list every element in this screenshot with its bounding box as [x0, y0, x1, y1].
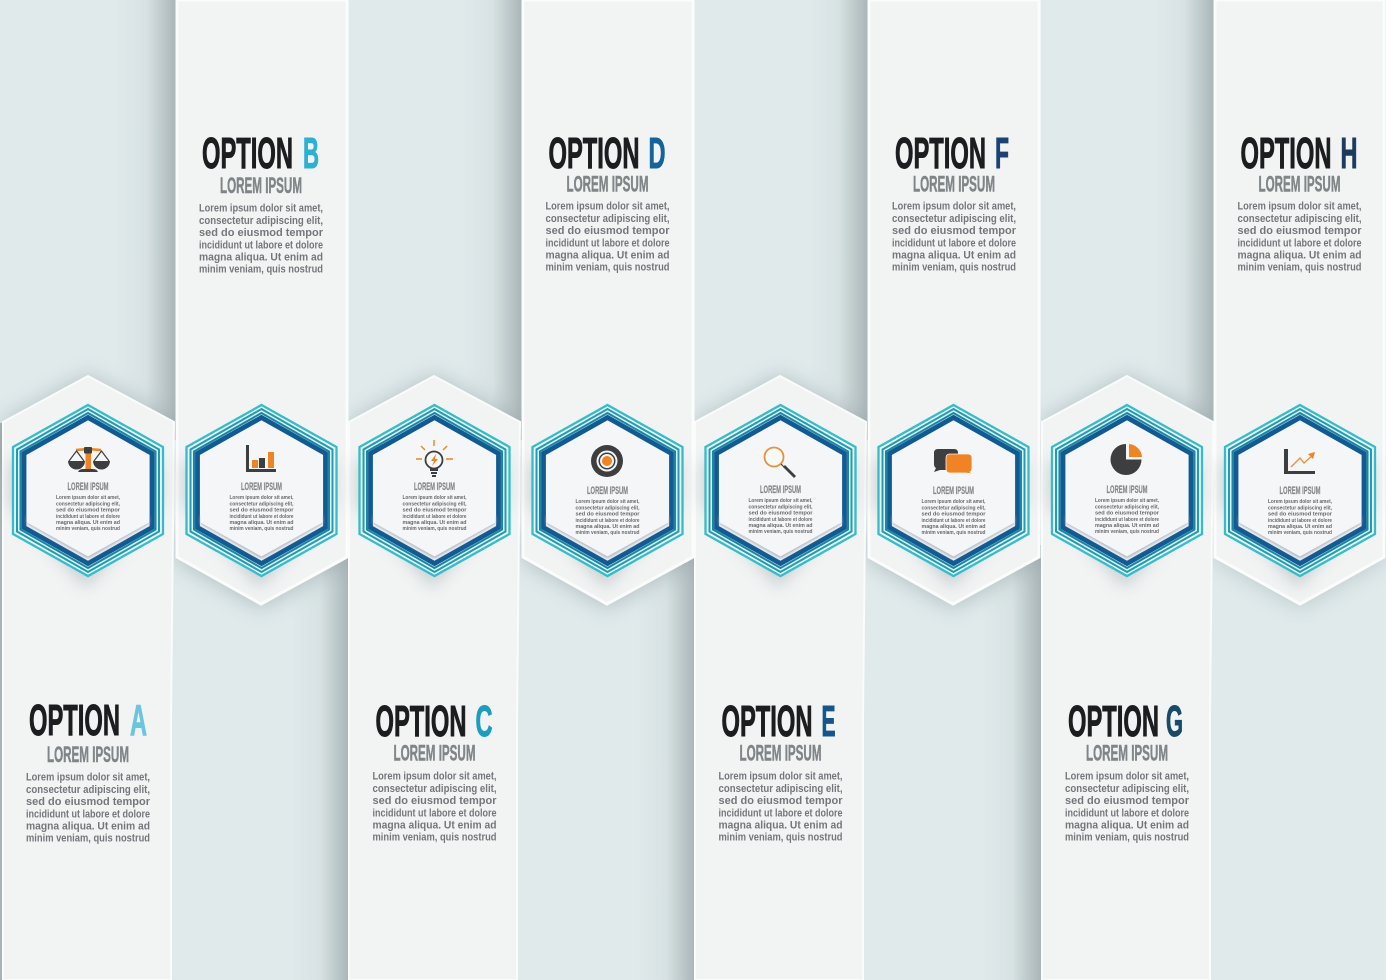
text block: option C: incididunt ut labore et dolore [372, 807, 496, 819]
hexagon E [702, 405, 856, 588]
text block: option D: LOREM IPSUM [566, 172, 648, 196]
icon: magnifier [764, 448, 795, 477]
hexagon text D: magna aliqua. Ut enim ad [576, 524, 640, 530]
text block: option H: Lorem ipsum dolor sit amet, [1238, 200, 1362, 212]
text block: option G: consectetur adipiscing elit, [1065, 783, 1189, 795]
text block: option F [892, 129, 1017, 274]
text block: option C: Lorem ipsum dolor sit amet, [372, 770, 496, 782]
hexagon text C: Lorem ipsum dolor sit amet, [402, 495, 467, 501]
text block: option B: LOREM IPSUM [220, 173, 302, 198]
hexagon text B: magna aliqua. Ut enim ad [230, 520, 294, 526]
text block: option F: OPTION [895, 129, 986, 178]
hexagon text C: incididunt ut labore et dolore [402, 514, 466, 520]
hexagon text H: magna aliqua. Ut enim ad [1268, 524, 1333, 530]
hexagon F [876, 405, 1028, 588]
hexagon text A: sed do eiusmod tempor [56, 508, 121, 514]
text block: option D: Lorem ipsum dolor sit amet, [546, 200, 670, 212]
text block: option D: OPTION [548, 129, 640, 178]
text block: option B: incididunt ut labore et dolore [199, 239, 323, 251]
hexagon text H [1268, 485, 1333, 536]
hexagon text F: LOREM IPSUM [933, 485, 974, 497]
hexagon text G: Lorem ipsum dolor sit amet, [1095, 498, 1159, 504]
hexagon text C: minim veniam, quis nostrud [402, 526, 467, 532]
text block: option E: Lorem ipsum dolor sit amet, [718, 770, 842, 782]
text block: option C: consectetur adipiscing elit, [372, 783, 496, 795]
hexagon text H: incididunt ut labore et dolore [1268, 518, 1332, 524]
text block: option D: consectetur adipiscing elit, [546, 213, 670, 225]
panel D [523, 0, 693, 604]
panel F [869, 0, 1039, 604]
text block: option C: sed do eiusmod tempor [372, 795, 497, 807]
text block: option A: Lorem ipsum dolor sit amet, [26, 772, 150, 784]
text block: option B: magna aliqua. Ut enim ad [199, 252, 323, 264]
text block: option G [1065, 697, 1190, 844]
text block: option B [199, 129, 324, 276]
text block: option F: incididunt ut labore et dolore [892, 237, 1016, 249]
hexagon text E: magna aliqua. Ut enim ad [748, 523, 813, 529]
text block: option C: LOREM IPSUM [394, 740, 476, 766]
icon: bar chart [246, 445, 276, 472]
hexagon text D: consectetur adipiscing elit, [576, 505, 640, 511]
hexagon text A: consectetur adipiscing elit, [56, 501, 120, 507]
panel A [3, 376, 174, 980]
text block: option H: magna aliqua. Ut enim ad [1238, 250, 1362, 262]
hexagon text C: LOREM IPSUM [414, 481, 455, 493]
text block: option D: D [648, 129, 666, 178]
text block: option E [718, 697, 843, 844]
hexagon text B [230, 481, 294, 532]
hexagon text D: LOREM IPSUM [587, 485, 628, 497]
text block: option A: consectetur adipiscing elit, [26, 784, 150, 796]
text block: option G: Lorem ipsum dolor sit amet, [1065, 770, 1189, 782]
hexagon text B: minim veniam, quis nostrud [230, 526, 294, 532]
hexagon text B: Lorem ipsum dolor sit amet, [230, 495, 294, 501]
text block: option G: minim veniam, quis nostrud [1065, 832, 1189, 844]
text block: option E: OPTION [722, 697, 812, 746]
hexagon text G [1095, 484, 1160, 535]
text block: option E: E [822, 697, 836, 746]
panel E [695, 376, 866, 980]
hexagon text D: incididunt ut labore et dolore [576, 518, 640, 524]
panel G [1042, 376, 1213, 980]
text block: option A: LOREM IPSUM [47, 742, 129, 767]
text block: option E: magna aliqua. Ut enim ad [718, 820, 842, 832]
text block: option G: incididunt ut labore et dolore [1065, 807, 1189, 819]
hexagon text H: LOREM IPSUM [1280, 485, 1320, 497]
hexagon text D: sed do eiusmod tempor [576, 512, 640, 518]
panel C [349, 376, 520, 980]
hexagon A [10, 405, 163, 588]
hexagon text C: sed do eiusmod tempor [402, 508, 467, 514]
text block: option B: Lorem ipsum dolor sit amet, [199, 202, 323, 214]
hexagon text H: Lorem ipsum dolor sit amet, [1268, 499, 1332, 505]
text block: option F: LOREM IPSUM [913, 172, 995, 196]
text block: option E: minim veniam, quis nostrud [718, 832, 842, 844]
hexagon text H: sed do eiusmod tempor [1268, 512, 1333, 518]
hexagon text D: minim veniam, quis nostrud [576, 530, 640, 536]
text block: option E: sed do eiusmod tempor [718, 795, 843, 807]
icon: line chart [1284, 449, 1315, 474]
text block: option F: F [995, 129, 1009, 178]
text block: option G: sed do eiusmod tempor [1065, 795, 1190, 807]
text block: option C [372, 697, 497, 844]
hexagon text E: consectetur adipiscing elit, [748, 504, 813, 510]
text block: option B: minim veniam, quis nostrud [199, 264, 323, 276]
text block: option G: G [1166, 697, 1183, 746]
text block: option D: minim veniam, quis nostrud [546, 262, 670, 274]
text block: option G: magna aliqua. Ut enim ad [1065, 820, 1189, 832]
text block: option E: consectetur adipiscing elit, [718, 783, 842, 795]
text block: option F: minim veniam, quis nostrud [892, 262, 1016, 274]
icon: light bulb [416, 440, 453, 477]
text block: option B: B [303, 129, 319, 178]
hexagon text A [56, 481, 121, 532]
text block: option C: magna aliqua. Ut enim ad [372, 820, 496, 832]
text block: option E: LOREM IPSUM [740, 740, 822, 766]
text block: option B: OPTION [202, 129, 293, 178]
hexagon C [356, 405, 510, 588]
hexagon text B: consectetur adipiscing elit, [230, 501, 294, 507]
text block: option F: sed do eiusmod tempor [892, 225, 1017, 237]
hexagon text A: magna aliqua. Ut enim ad [56, 520, 121, 526]
icon: speech bubbles [934, 449, 973, 474]
hexagon text F: consectetur adipiscing elit, [922, 505, 986, 511]
hexagon text F: incididunt ut labore et dolore [922, 518, 986, 524]
hexagon text E: minim veniam, quis nostrud [748, 529, 813, 535]
text block: option D: magna aliqua. Ut enim ad [546, 250, 670, 262]
text block: option A: minim veniam, quis nostrud [26, 833, 150, 845]
hexagon text D [576, 485, 640, 536]
hexagon text C: magna aliqua. Ut enim ad [402, 520, 467, 526]
hexagon text G: minim veniam, quis nostrud [1095, 529, 1159, 535]
hexagon text G: sed do eiusmod tempor [1095, 511, 1160, 517]
hexagon text F: sed do eiusmod tempor [922, 512, 986, 518]
hexagon text C [402, 481, 467, 532]
panel H [1215, 0, 1384, 604]
icon: scales [68, 447, 110, 472]
hexagon text E [748, 484, 813, 535]
hexagon text F: minim veniam, quis nostrud [922, 530, 986, 536]
text block: option F: consectetur adipiscing elit, [892, 213, 1016, 225]
hexagon text D: Lorem ipsum dolor sit amet, [576, 499, 640, 505]
icon: pie chart [1110, 444, 1142, 475]
icon: target [591, 445, 623, 477]
hexagon text B: sed do eiusmod tempor [230, 508, 294, 514]
hexagon text E: sed do eiusmod tempor [748, 511, 813, 517]
text block: option H [1238, 129, 1362, 274]
hexagon text G: LOREM IPSUM [1106, 484, 1148, 496]
text block: option H: H [1340, 129, 1358, 178]
hexagon text B: LOREM IPSUM [241, 481, 282, 493]
text block: option B: consectetur adipiscing elit, [199, 215, 323, 227]
hexagon text F: magna aliqua. Ut enim ad [922, 524, 986, 530]
hexagon H [1222, 405, 1375, 588]
hexagon text G: magna aliqua. Ut enim ad [1095, 523, 1160, 529]
text block: option G: LOREM IPSUM [1086, 740, 1168, 766]
text block: option D: incididunt ut labore et dolore [546, 237, 670, 249]
hexagon text F: Lorem ipsum dolor sit amet, [922, 499, 986, 505]
hexagon text A: minim veniam, quis nostrud [56, 526, 120, 532]
hexagon text E: Lorem ipsum dolor sit amet, [748, 498, 813, 504]
text block: option C: OPTION [376, 697, 466, 746]
text block: option F: Lorem ipsum dolor sit amet, [892, 200, 1016, 212]
text block: option A: OPTION [29, 696, 120, 745]
text block: option E: incididunt ut labore et dolore [718, 807, 842, 819]
hexagon text E: incididunt ut labore et dolore [748, 517, 812, 523]
hexagon text A: Lorem ipsum dolor sit amet, [56, 495, 120, 501]
text block: option A: sed do eiusmod tempor [26, 796, 151, 808]
hexagon text C: consectetur adipiscing elit, [402, 501, 467, 507]
hexagon text H: minim veniam, quis nostrud [1268, 530, 1332, 536]
hexagon text A: LOREM IPSUM [68, 481, 108, 493]
hexagon text G: consectetur adipiscing elit, [1095, 504, 1159, 510]
hexagon text G: incididunt ut labore et dolore [1095, 517, 1159, 523]
text block: option D: sed do eiusmod tempor [546, 225, 670, 237]
text block: option H: minim veniam, quis nostrud [1238, 262, 1362, 274]
text block: option G: OPTION [1068, 697, 1159, 746]
text block: option B: sed do eiusmod tempor [199, 227, 324, 239]
hexagon text E: LOREM IPSUM [760, 484, 801, 496]
text block: option H: incididunt ut labore et dolore [1238, 237, 1362, 249]
hexagon text A: incididunt ut labore et dolore [56, 514, 120, 520]
text block: option C: minim veniam, quis nostrud [372, 832, 496, 844]
hexagon G [1049, 405, 1202, 588]
hexagon text H: consectetur adipiscing elit, [1268, 505, 1332, 511]
text block: option A [26, 696, 151, 845]
text block: option H: consectetur adipiscing elit, [1238, 213, 1362, 225]
hexagon B [184, 405, 336, 588]
hexagon text B: incididunt ut labore et dolore [230, 514, 294, 520]
text block: option A: magna aliqua. Ut enim ad [26, 820, 150, 832]
hexagon D [530, 405, 682, 588]
text block: option C: C [476, 697, 492, 746]
text block: option D [546, 129, 670, 274]
text block: option A: incididunt ut labore et dolore [26, 808, 150, 820]
text block: option F: magna aliqua. Ut enim ad [892, 250, 1016, 262]
text block: option H: sed do eiusmod tempor [1238, 225, 1362, 237]
panel B [177, 0, 347, 604]
text block: option A: A [130, 696, 147, 745]
hexagon text F [922, 485, 986, 536]
